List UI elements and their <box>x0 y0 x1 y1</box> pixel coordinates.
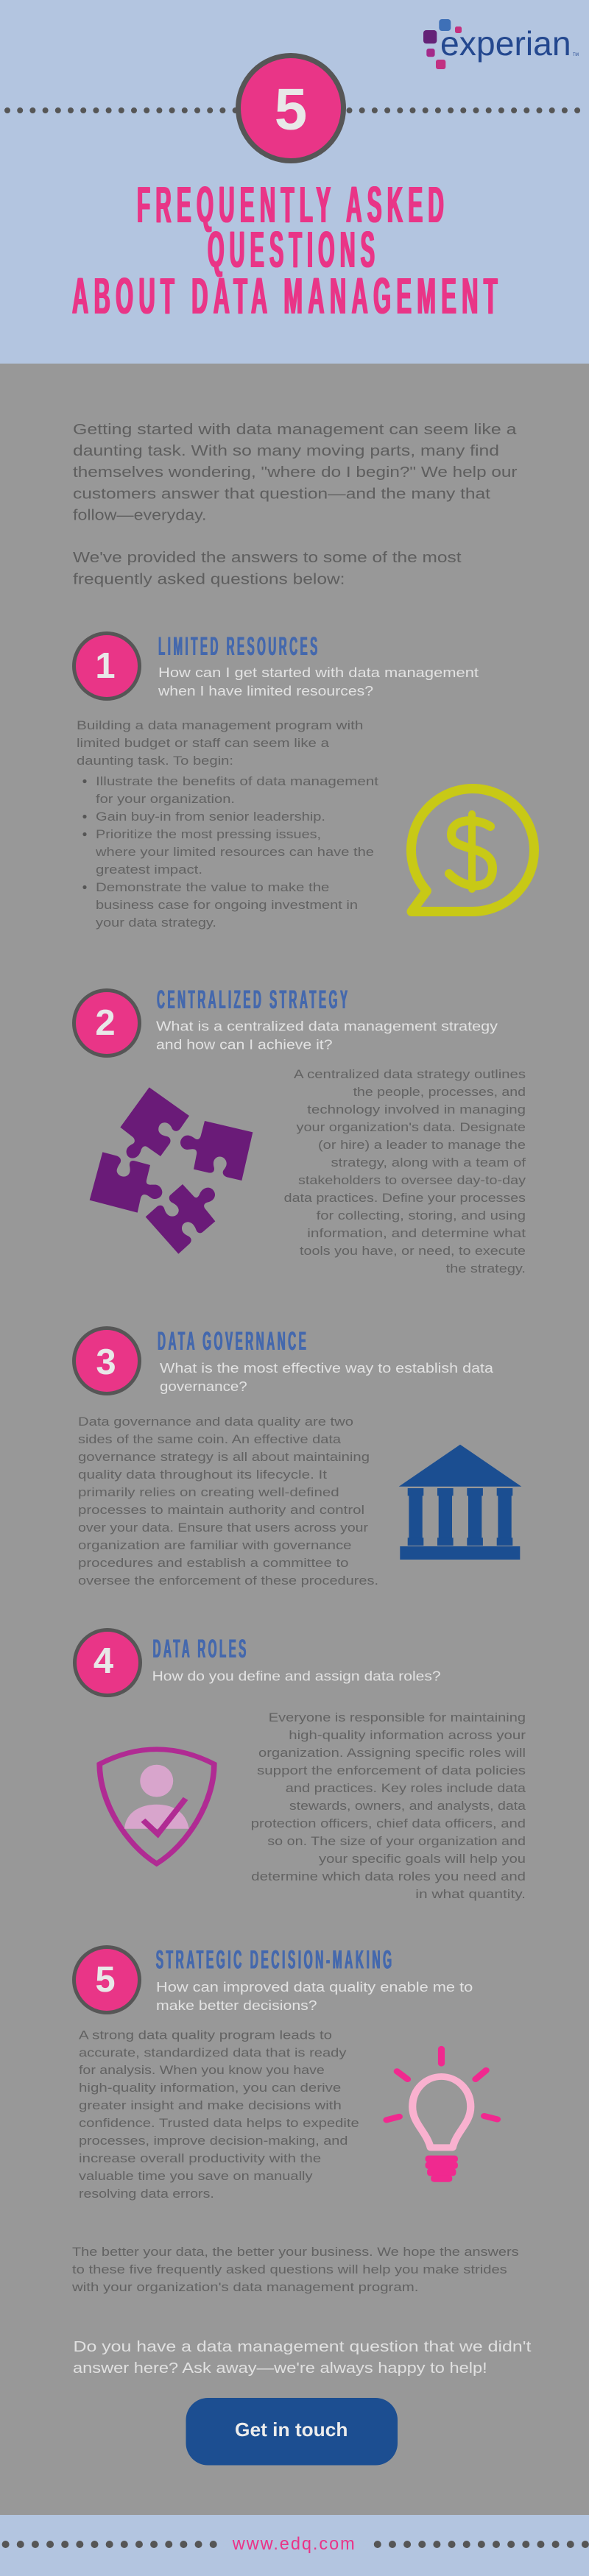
answer 2: technology involved in managing <box>307 1103 526 1117</box>
question 1: How can I get started with data management <box>158 665 479 680</box>
logo: experian <box>423 19 579 69</box>
question 4: How do you define and assign data roles? <box>152 1669 441 1684</box>
number badge 2 <box>74 991 140 1055</box>
answer 1: limited budget or staff can seem like a <box>77 736 330 750</box>
question 3: What is the most effective way to establish data <box>160 1361 494 1376</box>
section 3: data governance: DATA GOVERNANCE <box>158 1327 308 1356</box>
answer 1: for your organization. <box>96 792 235 806</box>
footer url: www.edq.com <box>232 2534 356 2554</box>
intro text: We've provided the answers to some of the most <box>73 549 462 566</box>
answer 4: your specific goals will help you <box>319 1852 526 1866</box>
question 3 <box>160 1361 494 1394</box>
answer 2: data practices. Define your processes <box>284 1191 526 1205</box>
answer 5: processes, improve decision-making, and <box>79 2134 348 2148</box>
intro text: frequently asked questions below: <box>73 571 345 587</box>
answer 4: support the enforcement of data policies <box>257 1763 526 1777</box>
icon: shield with person and check <box>99 1749 214 1864</box>
badge: big number 5: 5 <box>275 77 307 141</box>
question 1: when I have limited resources? <box>158 684 373 698</box>
answer 4: protection officers, chief data officers, and <box>251 1816 526 1830</box>
answer 4: stewards, owners, and analysts, data <box>289 1799 526 1813</box>
answer 1: where your limited resources can have the <box>95 845 374 859</box>
answer 3: primarily relies on creating well-defined <box>78 1485 339 1499</box>
footer panel <box>0 2515 589 2576</box>
closing text <box>71 2245 519 2294</box>
answer 1: Illustrate the benefits of data management <box>96 774 378 788</box>
section 2: centralized strategy <box>74 986 526 1275</box>
intro text: themselves wondering, "where do I begin?" We help our <box>73 464 518 481</box>
answer 2: for collecting, storing, and using <box>317 1209 526 1222</box>
call to action text <box>73 2338 532 2377</box>
answer 3: procedures and establish a committee to <box>78 1556 348 1570</box>
answer 3: Data governance and data quality are two <box>78 1415 353 1429</box>
number badge 5 <box>74 1947 140 2012</box>
number badge 1 <box>74 633 140 699</box>
icon: light bulb <box>387 2049 498 2182</box>
answer 4: high-quality information across your <box>289 1728 526 1742</box>
answer 5: accurate, standardized data that is ready <box>79 2046 347 2059</box>
answer 5: resolving data errors. <box>79 2187 214 2201</box>
intro text <box>73 421 518 587</box>
number badge 2: 2 <box>95 1003 116 1043</box>
answer 5: increase overall productivity with the <box>79 2151 321 2165</box>
intro text: Getting started with data management can seem like a <box>73 421 517 438</box>
intro text: customers answer that question—and the many that <box>73 486 490 502</box>
answer 3: organization are familiar with governance <box>78 1538 352 1552</box>
answer 4: and practices. Key roles include data <box>286 1781 526 1795</box>
question 3: governance? <box>160 1379 247 1394</box>
answer 5: greater insight and make decisions with <box>79 2098 342 2112</box>
answer 4: determine which data roles you need and <box>251 1869 526 1883</box>
answer 2: stakeholders to oversee day-to-day <box>298 1173 526 1187</box>
number badge 1: 1 <box>95 646 116 686</box>
answer 1: your data strategy. <box>96 916 216 930</box>
answer 4: Everyone is responsible for maintaining <box>269 1710 526 1724</box>
answer 5: valuable time you save on manually <box>79 2169 313 2183</box>
answer 4: so on. The size of your organization and <box>267 1834 526 1848</box>
answer 3: processes to maintain authority and control <box>78 1503 364 1517</box>
answer 2: your organization's data. Designate <box>296 1120 526 1134</box>
header panel <box>0 0 589 364</box>
answer 4: in what quantity. <box>415 1887 526 1901</box>
answer 1: Building a data management program with <box>77 718 363 732</box>
number badge 5: 5 <box>95 1960 116 2000</box>
answer 1: Prioritize the most pressing issues, <box>96 827 321 841</box>
answer 1: business case for ongoing investment in <box>96 898 358 912</box>
answer 5: for analysis. When you know you have <box>79 2063 325 2077</box>
number badge 4 <box>75 1630 140 1696</box>
answer 3: sides of the same coin. An effective data <box>78 1432 342 1446</box>
section 1: limited resources: LIMITED RESOURCES <box>158 632 320 661</box>
section 5: strategic decision-making <box>74 1946 498 2201</box>
closing text: with your organization's data management program. <box>71 2280 418 2294</box>
button: get in touch <box>186 2398 398 2466</box>
answer 1 <box>77 718 378 930</box>
badge: big number 5 <box>239 56 343 160</box>
answer 5: high-quality information, you can derive <box>79 2081 341 2095</box>
answer 1: Demonstrate the value to make the <box>96 880 329 894</box>
intro text: follow—everyday. <box>73 506 206 524</box>
answer 2: A centralized data strategy outlines <box>294 1067 526 1081</box>
answer 2: strategy, along with a team of <box>331 1156 526 1170</box>
button: get in touch: Get in touch <box>235 2418 348 2441</box>
section 2: centralized strategy: CENTRALIZED STRATEGY <box>157 986 350 1014</box>
call to action text: answer here? Ask away—we're always happy to help! <box>73 2360 487 2377</box>
answer 3: oversee the enforcement of these procedures. <box>78 1574 378 1588</box>
answer 4 <box>251 1710 526 1901</box>
closing text: The better your data, the better your business. We hope the answers <box>72 2245 519 2259</box>
answer 3 <box>78 1415 378 1588</box>
answer 5: A strong data quality program leads to <box>79 2028 332 2042</box>
question 5: make better decisions? <box>156 1998 317 2013</box>
answer 4: organization. Assigning specific roles will <box>258 1746 526 1760</box>
answer 3: governance strategy is all about maintaining <box>78 1450 370 1464</box>
question 5: How can improved data quality enable me to <box>156 1980 473 1995</box>
intro text: daunting task. With so many moving parts, many find <box>73 442 499 459</box>
answer 2: information, and determine what <box>307 1226 526 1240</box>
answer 5: confidence. Trusted data helps to expedite <box>79 2116 359 2130</box>
answer 1: Gain buy-in from senior leadership. <box>96 810 325 824</box>
call to action text: Do you have a data management question that we didn't <box>74 2338 532 2355</box>
section 4: data roles <box>75 1630 526 1901</box>
title <box>72 176 503 325</box>
icon: puzzle pieces <box>90 1087 253 1254</box>
icon: dollar speech bubble <box>411 788 534 911</box>
section 4: data roles: DATA ROLES <box>153 1635 249 1663</box>
answer 2: tools you have, or need, to execute <box>300 1244 526 1258</box>
answer 5 <box>79 2028 359 2201</box>
answer 2: the people, processes, and <box>353 1085 526 1099</box>
section 1: limited resources <box>74 632 534 930</box>
question 2 <box>156 1019 498 1052</box>
answer 1: daunting task. To begin: <box>77 754 233 768</box>
answer 2: the strategy. <box>446 1262 526 1275</box>
answer 3: over your data. Ensure that users across your <box>78 1521 368 1535</box>
logo: experian: TM <box>573 53 579 57</box>
answer 2: (or hire) a leader to manage the <box>318 1138 526 1152</box>
section 3: data governance <box>74 1327 521 1588</box>
number badge 3: 3 <box>96 1342 116 1382</box>
number badge 4: 4 <box>94 1641 113 1681</box>
closing text: to these five frequently asked questions will help you make strides <box>72 2262 507 2276</box>
number badge 3 <box>74 1328 140 1394</box>
answer 2 <box>284 1067 526 1275</box>
answer 1: greatest impact. <box>96 863 202 877</box>
icon: bank building <box>399 1445 521 1560</box>
question 1 <box>158 665 479 698</box>
question 5 <box>156 1980 473 2013</box>
answer 3: quality data throughout its lifecycle. It <box>78 1468 327 1482</box>
question 2: What is a centralized data management strategy <box>156 1019 498 1033</box>
question 2: and how can I achieve it? <box>156 1038 333 1052</box>
logo: experian: experian <box>440 24 571 63</box>
